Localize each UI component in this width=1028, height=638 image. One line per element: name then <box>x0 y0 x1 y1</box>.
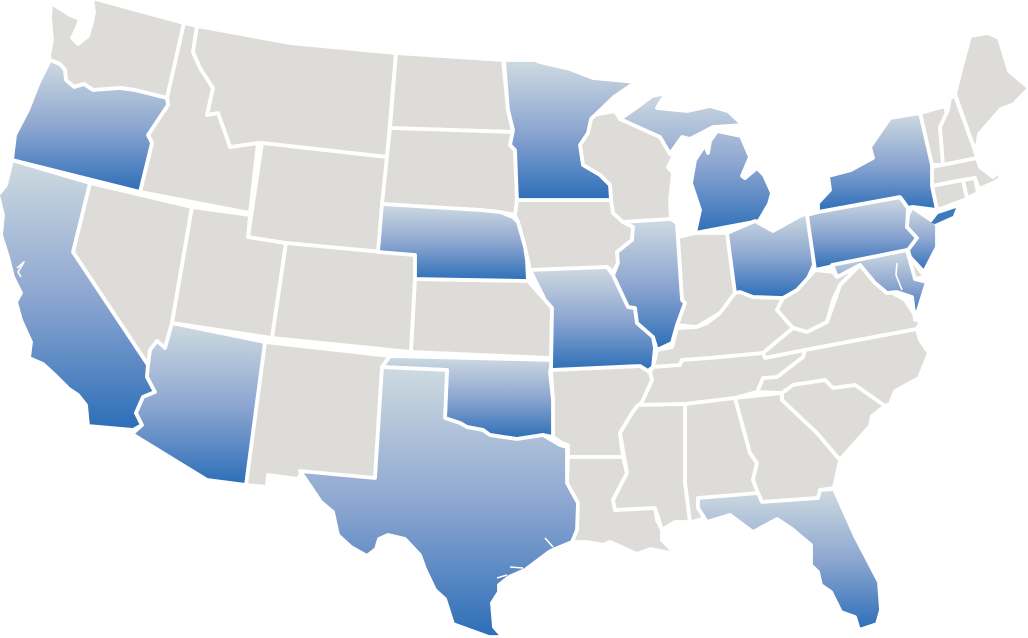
Washington <box>49 0 184 98</box>
San Francisco Bay <box>17 262 24 277</box>
Upper Peninsula <box>620 93 743 154</box>
Vermont <box>920 106 947 165</box>
Arizona <box>132 323 265 485</box>
Texas <box>300 367 578 637</box>
Nebraska <box>378 204 528 281</box>
Maryland <box>832 250 927 320</box>
New York <box>818 113 937 212</box>
Michigan <box>620 93 772 233</box>
Chesapeake Bay <box>896 263 902 290</box>
Arkansas <box>551 366 652 457</box>
Iowa <box>515 200 633 272</box>
Illinois <box>613 219 685 350</box>
Oklahoma <box>382 356 553 439</box>
Ohio <box>727 213 814 298</box>
Texas bays <box>497 538 553 578</box>
South Carolina <box>782 380 885 460</box>
Indiana <box>677 233 735 327</box>
Kansas <box>411 279 552 358</box>
North Carolina <box>757 329 929 406</box>
Florida <box>698 489 881 630</box>
Maine <box>955 33 1028 147</box>
Lower Peninsula <box>691 131 772 233</box>
Massachusetts <box>932 158 1000 189</box>
Delaware <box>905 253 925 279</box>
Kentucky <box>653 292 793 367</box>
Nevada <box>73 183 192 365</box>
New Jersey <box>907 207 937 272</box>
Connecticut <box>932 180 967 210</box>
Oregon <box>12 60 168 192</box>
California <box>0 160 155 430</box>
Louisiana <box>567 457 676 554</box>
Colorado <box>272 243 415 352</box>
Georgia <box>735 393 840 502</box>
Wisconsin <box>580 111 683 222</box>
Tennessee <box>638 350 805 405</box>
Mississippi <box>613 404 690 530</box>
Virginia <box>763 265 920 358</box>
New Hampshire <box>940 96 977 165</box>
Minnesota <box>504 60 636 200</box>
West Virginia <box>777 265 860 332</box>
Pennsylvania <box>807 197 917 270</box>
South Dakota <box>382 128 517 215</box>
North Dakota <box>390 53 513 132</box>
Utah <box>172 207 286 338</box>
New Mexico <box>246 342 390 487</box>
Montana <box>193 26 396 157</box>
Missouri <box>530 267 655 371</box>
Idaho <box>140 23 258 213</box>
Long Island <box>931 208 956 224</box>
Wyoming <box>248 143 387 252</box>
Rhode Island <box>963 178 978 198</box>
bays and inlets <box>17 262 902 578</box>
Alabama <box>685 398 758 522</box>
